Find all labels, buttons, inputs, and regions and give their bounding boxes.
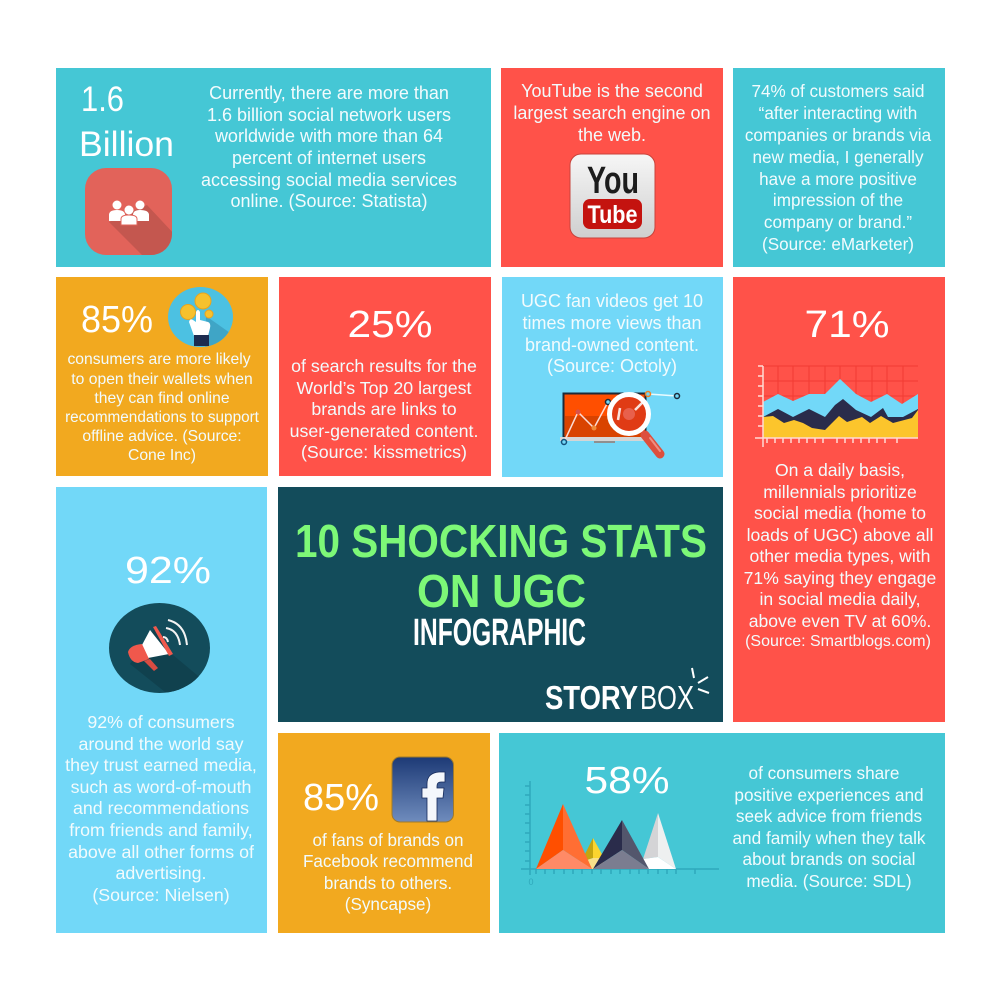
text block: the web. — [578, 125, 646, 145]
stat: 92%: 92% — [125, 550, 211, 592]
text block: accessing social media services — [201, 170, 457, 190]
text block: brand-owned content. — [525, 335, 699, 355]
text block: worldwide with more than 64 — [214, 126, 443, 146]
text block: (Source: Smartblogs.com) — [745, 633, 931, 650]
panel: 85% wallets — [56, 277, 268, 476]
panel: 74% of customers — [733, 68, 945, 267]
text block: Currently, there are more than — [209, 83, 449, 103]
stat: 58%: 58% — [584, 760, 670, 802]
text block: largest search engine on — [513, 103, 711, 123]
text block: from friends and family, — [69, 820, 253, 840]
title: 10 SHOCKING STATS — [295, 515, 707, 567]
text block: loads of UGC) above all — [747, 525, 933, 545]
text block: 92% of consumers — [87, 712, 235, 732]
stat: 85%: 85% — [303, 777, 379, 819]
panel: title — [278, 487, 723, 722]
text block: above all other forms of — [68, 842, 254, 862]
text block: about brands on social — [743, 849, 915, 869]
stat: 85%: 85% — [81, 299, 153, 341]
text block: offline advice. (Source: — [82, 428, 242, 445]
stat: 25%: 25% — [348, 304, 432, 346]
stat: 71%: 71% — [804, 304, 890, 346]
logo: Storybox: BOX — [640, 679, 694, 716]
text block — [303, 831, 473, 914]
text block: above even TV at 60%. — [749, 611, 931, 631]
text block: in social media daily, — [759, 589, 921, 609]
text block — [201, 83, 457, 211]
text block: (Source: kissmetrics) — [301, 442, 467, 462]
icon: hand and coins — [168, 287, 233, 347]
text block: around the world say — [78, 734, 244, 754]
text block: millennials prioritize — [763, 482, 917, 502]
text block — [744, 460, 936, 650]
heading: 1.6 Billion — [79, 80, 174, 164]
heading: 1.6 Billion: 1.6 — [81, 80, 124, 119]
text block: they trust earned media, — [65, 755, 257, 775]
text block: company or brand.” — [764, 213, 912, 232]
icon: laptop and magnifier — [560, 392, 680, 454]
text block: advertising. — [116, 863, 206, 883]
text block: brands are links to — [311, 399, 457, 419]
panel: YouTube — [501, 68, 723, 267]
text block: 1.6 billion social network users — [207, 105, 451, 125]
text block: such as word-of-mouth — [71, 777, 251, 797]
text block — [513, 81, 711, 145]
text block: and recommendations — [73, 798, 249, 818]
text block: user-generated content. — [290, 421, 478, 441]
text block: 71% saying they engage — [744, 568, 936, 588]
text block: Cone Inc) — [128, 447, 196, 464]
text block: online. (Source: Statista) — [230, 191, 428, 211]
chart: mountains: 0 — [528, 877, 534, 887]
text block: brands to others. — [324, 874, 452, 893]
heading: 1.6 Billion: Billion — [79, 125, 174, 164]
title — [295, 515, 707, 617]
panel: 1.6 billion — [56, 68, 491, 267]
panel: 25% search — [279, 277, 491, 476]
text block: On a daily basis, — [775, 460, 905, 480]
icon: YouTube: Tube — [588, 201, 638, 229]
text block — [745, 82, 932, 254]
text block: (Source: Nielsen) — [92, 885, 230, 905]
text block: they can find online — [94, 390, 230, 407]
chart: area chart — [755, 366, 918, 447]
text block: recommendations to support — [65, 409, 260, 426]
logo: Storybox: STORY — [545, 679, 638, 716]
icon: people — [85, 168, 175, 258]
logo: Storybox — [545, 668, 709, 716]
text block: other media types, with — [750, 546, 930, 566]
text block: (Syncapse) — [345, 895, 431, 914]
text block: media. (Source: SDL) — [746, 871, 912, 891]
text block: 74% of customers said — [752, 82, 924, 101]
chart: mountains — [521, 781, 719, 887]
text block: of consumers share — [749, 763, 899, 783]
text block: consumers are more likely — [67, 351, 251, 368]
text block: “after interacting with — [759, 104, 917, 123]
panel: 71% millennials — [733, 277, 945, 722]
text block: of fans of brands on — [312, 831, 464, 850]
panel: 92% earned media — [56, 487, 267, 933]
text block: percent of internet users — [232, 148, 426, 168]
text block — [65, 712, 257, 905]
text block — [733, 763, 926, 891]
icon: megaphone — [109, 603, 210, 693]
text block: impression of the — [773, 191, 903, 210]
text block: (Source: eMarketer) — [762, 235, 914, 254]
panel: 85% Facebook — [278, 733, 490, 933]
title: ON UGC — [417, 565, 586, 617]
subtitle: INFOGRAPHIC — [413, 612, 586, 654]
text block: companies or brands via — [745, 126, 932, 145]
text block: new media, I generally — [752, 148, 924, 167]
icon: YouTube: You — [587, 160, 639, 202]
text block — [521, 291, 703, 376]
text block: times more views than — [522, 313, 702, 333]
text block: Facebook recommend — [303, 852, 473, 871]
text block: (Source: Octoly) — [547, 356, 677, 376]
text block — [65, 351, 260, 464]
panel: 58% share — [499, 733, 945, 933]
text block: YouTube is the second — [521, 81, 703, 101]
text block: seek advice from friends — [736, 806, 922, 826]
text block: of search results for the — [291, 356, 477, 376]
text block: and family when they talk — [733, 828, 926, 848]
text block: UGC fan videos get 10 — [521, 291, 703, 311]
panel: UGC fan videos — [502, 277, 723, 477]
icon: Facebook — [392, 757, 454, 822]
text block: positive experiences and — [734, 785, 924, 805]
text block — [290, 356, 478, 462]
text block: World’s Top 20 largest — [297, 378, 472, 398]
text block: have a more positive — [759, 170, 917, 189]
text block: social media (home to — [754, 503, 926, 523]
icon: YouTube — [570, 154, 655, 238]
text block: to open their wallets when — [71, 371, 253, 388]
